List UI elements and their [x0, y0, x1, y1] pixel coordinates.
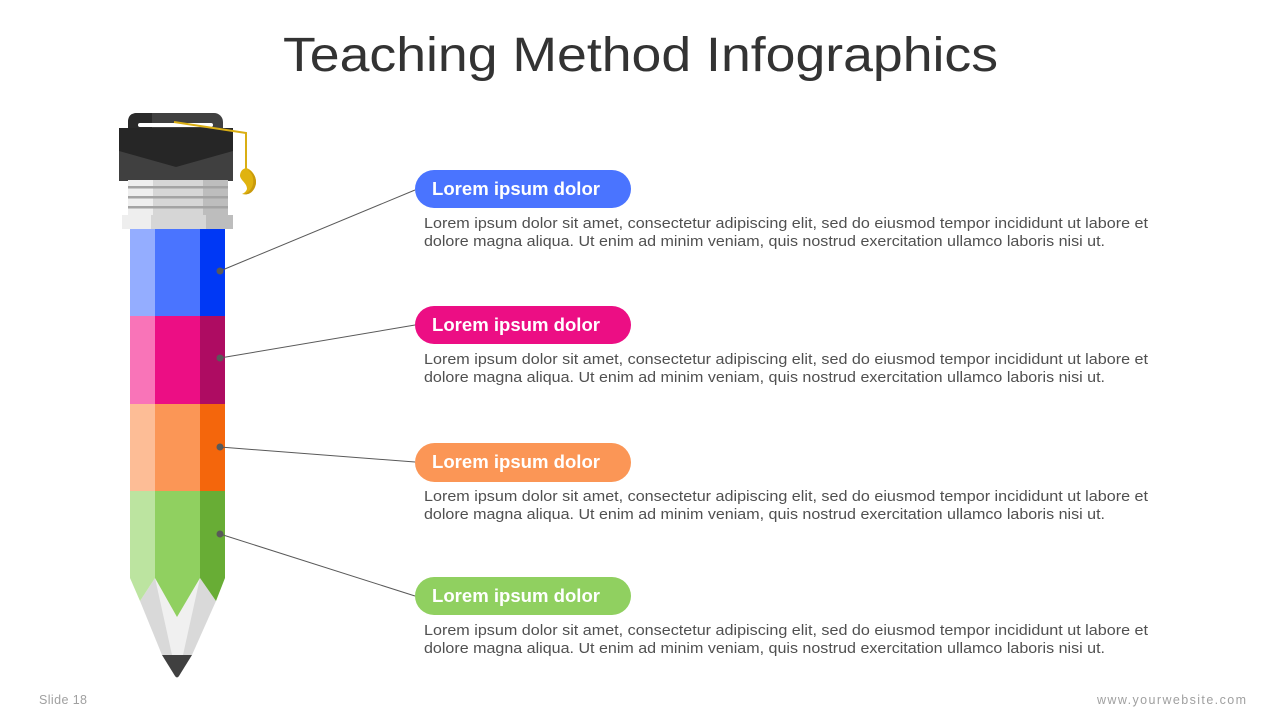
connector 2: [216, 325, 415, 362]
pencil tip: [140, 578, 216, 678]
pencil segment: blue: [130, 229, 225, 316]
label pill: blue: Lorem ipsum dolor: [432, 179, 600, 199]
connector 4: [216, 530, 415, 596]
label pill: blue: [415, 170, 631, 208]
item 1: [415, 170, 1148, 250]
icon: cap tassel: [174, 122, 256, 194]
description 1: [424, 216, 1148, 250]
description 3: dolore magna aliqua. Ut enim ad minim veniam, quis nostrud exercitation ullamco laboris nisi ut.: [424, 507, 1105, 523]
description 3: [424, 489, 1148, 523]
description 1: Lorem ipsum dolor sit amet, consectetur adipiscing elit, sed do eiusmod tempor incididunt ut labore et: [424, 216, 1148, 232]
description 2: Lorem ipsum dolor sit amet, consectetur adipiscing elit, sed do eiusmod tempor incididunt ut labore et: [424, 352, 1148, 368]
pencil ferrule: [122, 180, 233, 229]
item 4: [415, 577, 1148, 657]
connector 3: [216, 444, 415, 462]
title: Teaching Method Infographics: [283, 29, 998, 82]
description 2: dolore magna aliqua. Ut enim ad minim veniam, quis nostrud exercitation ullamco laboris nisi ut.: [424, 370, 1105, 386]
pencil illustration: [119, 113, 256, 678]
item 2: [415, 306, 1148, 386]
description 1: dolore magna aliqua. Ut enim ad minim veniam, quis nostrud exercitation ullamco laboris nisi ut.: [424, 234, 1105, 250]
description 4: [424, 623, 1148, 657]
footer: slide number: Slide 18: [39, 693, 87, 707]
label pill: orange: [415, 443, 631, 482]
pencil segment: orange: [130, 404, 225, 491]
pencil segment: pink: [130, 316, 225, 404]
description 4: Lorem ipsum dolor sit amet, consectetur adipiscing elit, sed do eiusmod tempor incididunt ut labore et: [424, 623, 1148, 639]
icon: graduation cap: [119, 113, 233, 181]
description 4: dolore magna aliqua. Ut enim ad minim veniam, quis nostrud exercitation ullamco laboris nisi ut.: [424, 641, 1105, 657]
label pill: pink: Lorem ipsum dolor: [432, 315, 600, 335]
label pill: pink: [415, 306, 631, 344]
label pill: green: Lorem ipsum dolor: [432, 586, 600, 606]
label pill: green: [415, 577, 631, 615]
description 3: Lorem ipsum dolor sit amet, consectetur adipiscing elit, sed do eiusmod tempor incididunt ut labore et: [424, 489, 1148, 505]
item 3: [415, 443, 1148, 523]
pencil segment: green: [130, 491, 225, 617]
description 2: [424, 352, 1148, 386]
footer: website: www.yourwebsite.com: [1096, 693, 1246, 707]
label pill: orange: Lorem ipsum dolor: [432, 452, 600, 472]
connector 1: [216, 190, 415, 274]
